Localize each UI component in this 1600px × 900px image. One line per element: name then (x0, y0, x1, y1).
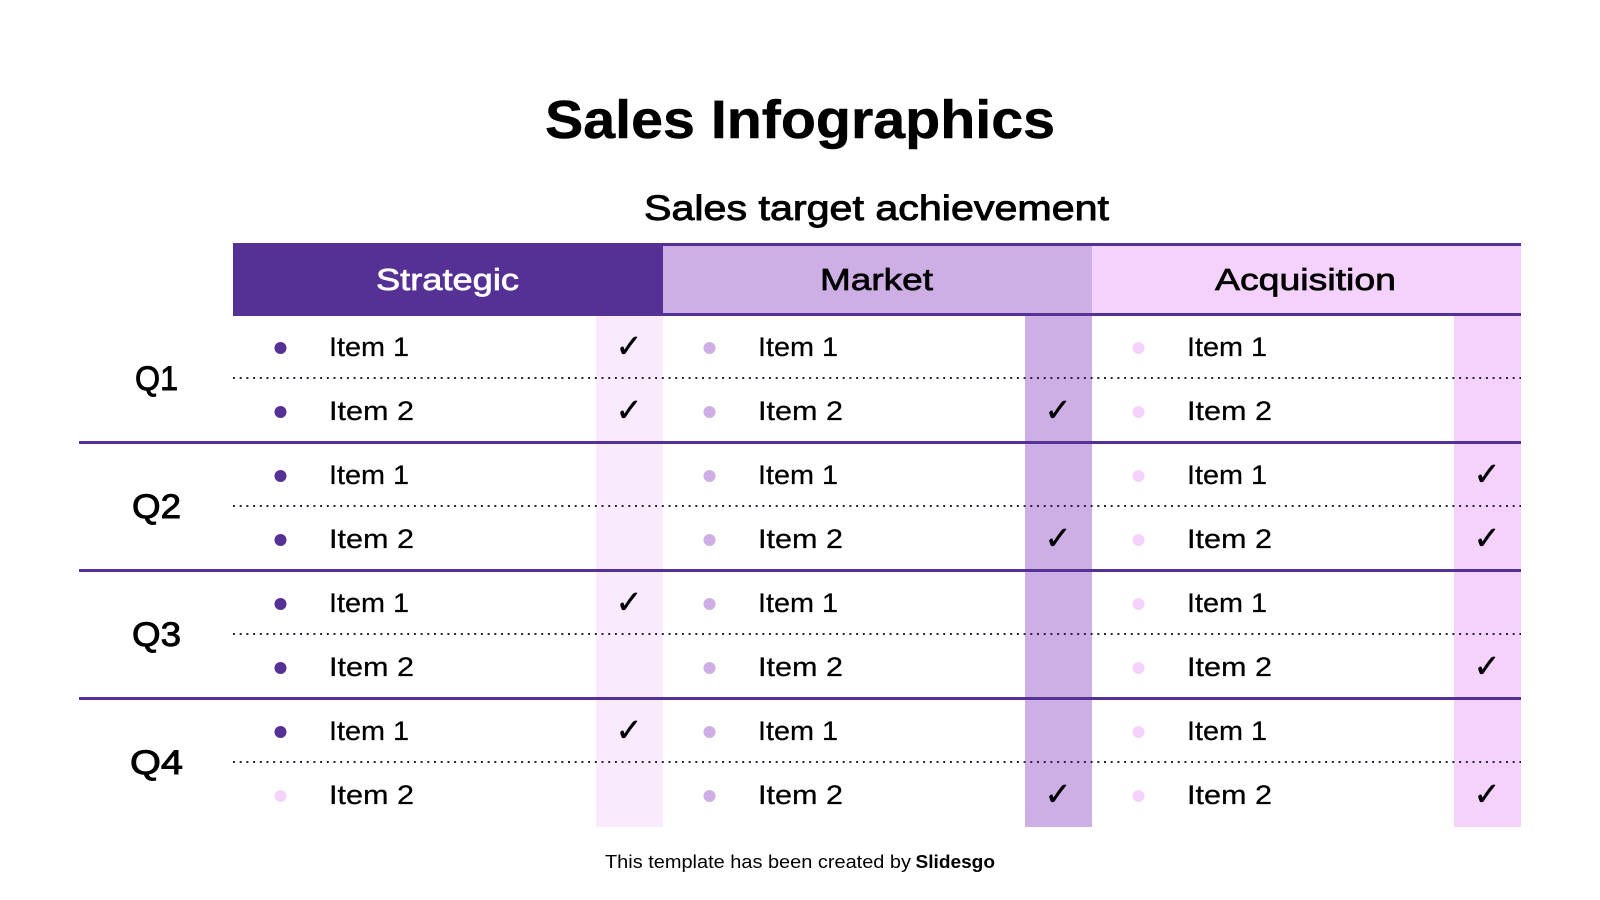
check marks: Acquisition: ✓ (1474, 647, 1500, 685)
quarter labels: Q1 (135, 360, 178, 398)
quarter divider lines (79, 441, 1521, 700)
items: Strategic: Item 2 (329, 780, 414, 810)
items: Strategic: Item 1 (329, 460, 409, 490)
items: Strategic: Item 1 (329, 332, 409, 362)
check marks: Acquisition: ✓ (1474, 519, 1500, 557)
items: Acquisition: Item 1 (1187, 460, 1267, 490)
check marks: Strategic: ✓ (616, 327, 642, 365)
header: Market: Market (820, 262, 933, 297)
header: Acquisition: Acquisition (1215, 262, 1396, 297)
items: Market: Item 1 (758, 332, 838, 362)
items: Acquisition: Item 2 (1187, 396, 1272, 426)
items: Market: Item 2 (758, 780, 843, 810)
items: Market (758, 332, 843, 810)
check marks: Acquisition (1474, 455, 1500, 813)
items: Acquisition: Item 2 (1187, 652, 1272, 682)
items: Market: Item 1 (758, 716, 838, 746)
check marks: Market: ✓ (1045, 775, 1071, 813)
items: Strategic: Item 2 (329, 652, 414, 682)
footer credit: This template has been created by (605, 851, 912, 872)
check marks: Market: ✓ (1045, 391, 1071, 429)
quarter labels: Q3 (132, 616, 181, 654)
check marks: Strategic: ✓ (616, 583, 642, 621)
bullets: Acquisition (1132, 342, 1144, 802)
title: Sales Infographics (545, 90, 1055, 150)
subtitle: Sales target achievement (644, 189, 1109, 228)
check marks: Strategic (616, 327, 642, 749)
dotted row lines (233, 378, 1521, 762)
items: Market: Item 1 (758, 588, 838, 618)
check marks: Strategic: ✓ (616, 711, 642, 749)
items: Acquisition: Item 1 (1187, 588, 1267, 618)
quarter labels: Q2 (132, 488, 181, 526)
quarter labels: Q4 (130, 744, 183, 782)
items: Strategic: Item 2 (329, 524, 414, 554)
check marks: Market (1045, 391, 1071, 813)
items: Strategic: Item 2 (329, 396, 414, 426)
items: Acquisition: Item 2 (1187, 524, 1272, 554)
bullets: Strategic (274, 342, 286, 802)
highlight columns (596, 316, 1521, 827)
items: Acquisition: Item 1 (1187, 332, 1267, 362)
check marks: Acquisition: ✓ (1474, 455, 1500, 493)
check marks: Strategic: ✓ (616, 391, 642, 429)
footer credit: Slidesgo (916, 851, 995, 872)
items: Acquisition: Item 1 (1187, 716, 1267, 746)
header: Strategic: Strategic (376, 262, 519, 297)
items: Strategic (329, 332, 414, 810)
table header (233, 243, 1521, 316)
quarter labels (130, 360, 183, 782)
items: Acquisition: Item 2 (1187, 780, 1272, 810)
items: Acquisition (1187, 332, 1272, 810)
items: Strategic: Item 1 (329, 588, 409, 618)
check marks: Acquisition: ✓ (1474, 775, 1500, 813)
items: Market: Item 2 (758, 396, 843, 426)
items: Market: Item 2 (758, 524, 843, 554)
bullets: Market (704, 342, 716, 802)
check marks: Market: ✓ (1045, 519, 1071, 557)
items: Market: Item 1 (758, 460, 838, 490)
items: Strategic: Item 1 (329, 716, 409, 746)
items: Market: Item 2 (758, 652, 843, 682)
